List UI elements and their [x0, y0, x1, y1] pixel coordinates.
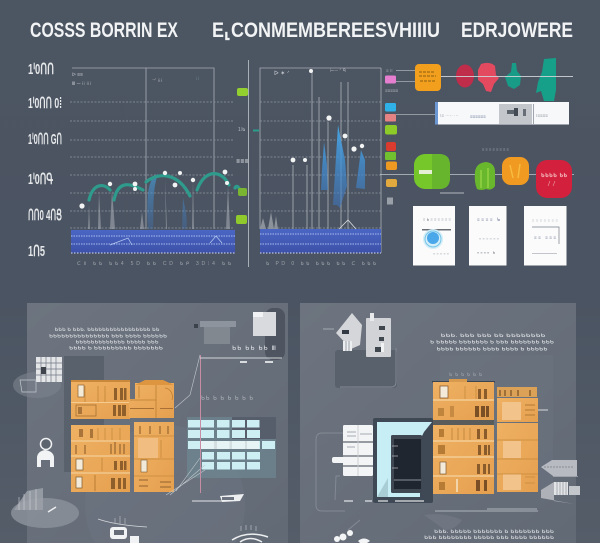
- card: right document: ≡≡≡≡≡≡≡: [532, 218, 559, 223]
- title: right heading: EDRJOWERE: [461, 19, 573, 42]
- center chart x-axis labels: ᑲ PD 0 ᑲᑲ ᑲᑲᑲ ᑲᑲ ᑕ ᑲᑲᑲ: [266, 261, 376, 267]
- connector lines to keyboard: [166, 355, 205, 495]
- card: center document: ≡≡≡≡ ᑲ: [477, 251, 496, 255]
- legend connector lines: [396, 70, 435, 114]
- text block: right panel intro: [430, 333, 554, 352]
- backing shade: [64, 356, 104, 472]
- white data bar: ⁝≡ ····· ···: [440, 113, 459, 118]
- text block: left panel intro: ᑲᑲᑲᑲᑲᑲᑲᑲᑲᑲᑲᑲᑲᑲᑲ ᑲᑲᑲ ᑲᑲᑲᑲ ᑲᑲᑲᑲᑲᑲ: [49, 334, 167, 340]
- icon: printer bottom center: [98, 516, 147, 543]
- card: left document: ≡≡≡≡≡: [433, 252, 450, 256]
- center chart top annotation right: ⊢─ ᐟ ᑫ: [330, 67, 346, 74]
- card: left document: [413, 206, 455, 266]
- chart blue peaks: [147, 174, 187, 229]
- icon: white server stack: [332, 425, 373, 476]
- text block: right panel footer: ᑲᑲᑲ ᑲᑲᑲᑲᑲᑲᑲᑲ ᑲᑲᑲᑲᑲ ᑲᑲᑲ ᑲᑲᑲᑲ ᑲᑲᑲᑲᑲᑲ: [424, 535, 554, 541]
- icon: tag with arrow: [541, 460, 578, 476]
- icon: flower cluster bottom left: [334, 520, 370, 543]
- text block: left panel intro: ᑲᑲᑲᑲ ᑲ ᑲᑲᑲᑲᑲᑲᑲᑲᑲ ᑲᑲᑲᑲᑲᑲᑲ: [69, 346, 163, 352]
- building: lower right block: [134, 422, 174, 492]
- horizontal rule lower right: [435, 509, 538, 511]
- row labels: left axis: 1ᑊ0ՈՈ 0⁞: [28, 95, 62, 112]
- center chart blue band: [260, 229, 381, 253]
- icon: green cylinder: [475, 162, 495, 190]
- panel: lower left: [11, 303, 288, 543]
- building: upper left block: [71, 380, 130, 419]
- row labels: left axis: [28, 61, 62, 260]
- shaded side column: [440, 355, 553, 490]
- row labels: left axis: ՈՈ0 4ՈՑ: [28, 207, 62, 224]
- text block: right panel footer: ᑲᑲᑲ. ᑲᑲᑲᑲᑲ ᑲᑲᑲᑲᑲᑲᑲ ᑲ ᑲᑲᑲᑲᑲᑲᑲ ᑲᑲᑲ: [434, 529, 554, 535]
- text block: left panel intro: ᑲᑲᑲ ᑲ ᑲᑲᑲ. ᑲᑲᑲᑲᑲᑲᑲᑲᑲᑲᑲᑲᑲᑲᑲᑲᑲ ᑲᑲ: [54, 327, 160, 333]
- arrow below blobs: [440, 192, 464, 194]
- building: upper right block: [129, 380, 174, 418]
- building: main tower: [432, 379, 495, 494]
- caption above blobs: ≡≡≡≡≡≡≡≡: [482, 147, 510, 152]
- green tags between charts: ≣≣≣: [236, 156, 249, 165]
- text block: right panel footer: [424, 529, 554, 541]
- chart spikes: [88, 178, 230, 229]
- label above building: ᑲᑲᑲᑲᑲᑲ: [449, 372, 482, 378]
- icon: red oval: [456, 64, 474, 88]
- chart top annotations: ᐅ ≡≡: [72, 72, 83, 78]
- chart marker pins: [79, 170, 229, 209]
- panel: lower right: [300, 303, 580, 543]
- text block: right panel intro: ᑲᑲᑲ. ᑲᑲᑲ ᑲᑲᑲ ᑲᑲ ᑲᑲᑲᑲᑲᑲᑲᑲ: [440, 333, 546, 339]
- chart top annotations: ᐨᐟ ⁝⁝⁝: [152, 78, 163, 84]
- vertical divider: [248, 60, 249, 267]
- circular shade: [85, 425, 245, 543]
- icon: orange blob: [502, 157, 529, 185]
- rounded frame outline: [340, 348, 396, 387]
- white data bar: [435, 102, 569, 124]
- center chart marker pins: [291, 69, 364, 162]
- text block: left panel intro: ᑲᑲᑲᑲᑲᑲᑲᑲᑲᑲᑲᑲᑲ ᑲᑲᑲᑲᑲ ᑲᑲᑲ: [76, 340, 158, 346]
- row labels: left axis: 1ᑊ0ՈԳ: [28, 171, 53, 188]
- pink vertical line: [200, 355, 201, 493]
- icon: scanner: [192, 494, 244, 502]
- outline frame around server: [316, 433, 345, 511]
- keyboard panel: [187, 417, 276, 478]
- dashboard top right: [194, 308, 285, 363]
- chart top annotations: [72, 72, 200, 87]
- center chart top annotations: ᐅ ✶ ᐟ: [274, 70, 290, 77]
- icon: green blob: [414, 154, 450, 189]
- label above keyboard: ᑲᑲ ᑲ ᑲ ᑲ ᑲ ᑲ ᑲ: [201, 396, 253, 402]
- chart x-axis labels: ᑕⅡ ᑲᑲ ᑲᑲ4 5D ᑲᑲ CD ᑲᑭ 3D⁞4 ᑲᑲ: [77, 261, 231, 267]
- card: left document: ≡ᑲ≡≡≡≡≡≡: [423, 217, 452, 222]
- icon: server rack top left: [13, 357, 62, 398]
- chart: left area chart: [70, 68, 240, 267]
- row labels: left axis: 1Ո5: [28, 243, 45, 260]
- icon: satellite dish: [323, 313, 362, 351]
- icon: router bottom right: [232, 525, 268, 542]
- text block: right panel intro: ᑲᑲᑲᑲ ᑲᑲᑲᑲᑲᑲ ᑲᑲᑲᑲ ᑲᑲᑲᑲ ᑲ ᑲᑲᑲᑲᑲ: [436, 346, 548, 352]
- card: center document: ≡≡≡≡≡≡: [479, 237, 500, 241]
- icon: orange note: [415, 64, 441, 91]
- center chart blue spikes: [321, 125, 365, 208]
- card: right document: ≡≡ ≡≡≡: [534, 235, 556, 240]
- legend tags: ≡ ⁝⁝: [386, 68, 393, 73]
- white data bar: ≡≡≡≡≡≡: [470, 114, 486, 119]
- chart teal arcs: [89, 174, 240, 200]
- icon: teal hand: [536, 58, 556, 101]
- icon: document with parts: [366, 313, 391, 357]
- row labels: left axis: 1ᑊ0ՈՈ: [28, 61, 54, 78]
- icon: red blob: [536, 160, 572, 198]
- white data bar: ⁝≡≡≡≡: [536, 113, 548, 118]
- chart blue band: [71, 230, 235, 253]
- card: right document: [524, 206, 566, 266]
- horizontal connector line: [380, 173, 574, 176]
- legend tags: [385, 68, 399, 204]
- building: lower left block: [71, 425, 130, 492]
- legend tags: ≡≡≡≡≡: [385, 88, 399, 93]
- text block: left panel intro: [49, 327, 167, 352]
- chart top annotations: Ⅲ ─ ⁝⁝ ⁝⁝⁝: [72, 81, 92, 87]
- building: side tower: [497, 387, 548, 492]
- dashboard top right: ᑲᑲ ᑲᑲ ᑲᑲ Ⅲ: [232, 345, 277, 352]
- icon: machine unit: [541, 482, 580, 504]
- faint arc shape: [424, 514, 462, 530]
- rounded grey frame: [335, 350, 397, 388]
- icon: pink shape: [478, 63, 499, 92]
- chart top annotations: ⁝⁝: [196, 76, 200, 82]
- tablet device: [344, 418, 433, 503]
- infographic canvas: 1ᑊ0ՈՈ GՈ: [28, 131, 62, 148]
- chart: center column chart: [260, 67, 381, 267]
- card: center document: [469, 206, 506, 266]
- icon: cloud bottom left: [11, 488, 79, 528]
- card: center document: ≡≡≡≡ ᑲ: [477, 217, 500, 222]
- green tags between charts: [236, 88, 259, 224]
- icon: teal shape: [505, 63, 521, 89]
- green tags between charts: 1⁞ᑲ: [238, 127, 245, 133]
- icon: person with headset: [37, 438, 54, 467]
- center chart stems: [293, 72, 348, 229]
- title: left heading: COSSS BORRIN EX: [30, 19, 178, 42]
- horizontal connector line: [441, 75, 573, 78]
- title: center heading: E⸤CONMEMBEREESVHIIIU: [212, 19, 440, 42]
- text block: right panel intro: ᑲ ᑲᑲᑲᑲᑲ ᑲᑲᑲᑲᑲᑲᑲ ᑲ ᑲᑲᑲ ᑲᑲᑲᑲᑲᑲᑲ ᑲᑲᑲ: [430, 340, 554, 346]
- icon: red blob: ᑲᑲᑲᑲ ᑲᑲ: [541, 172, 568, 179]
